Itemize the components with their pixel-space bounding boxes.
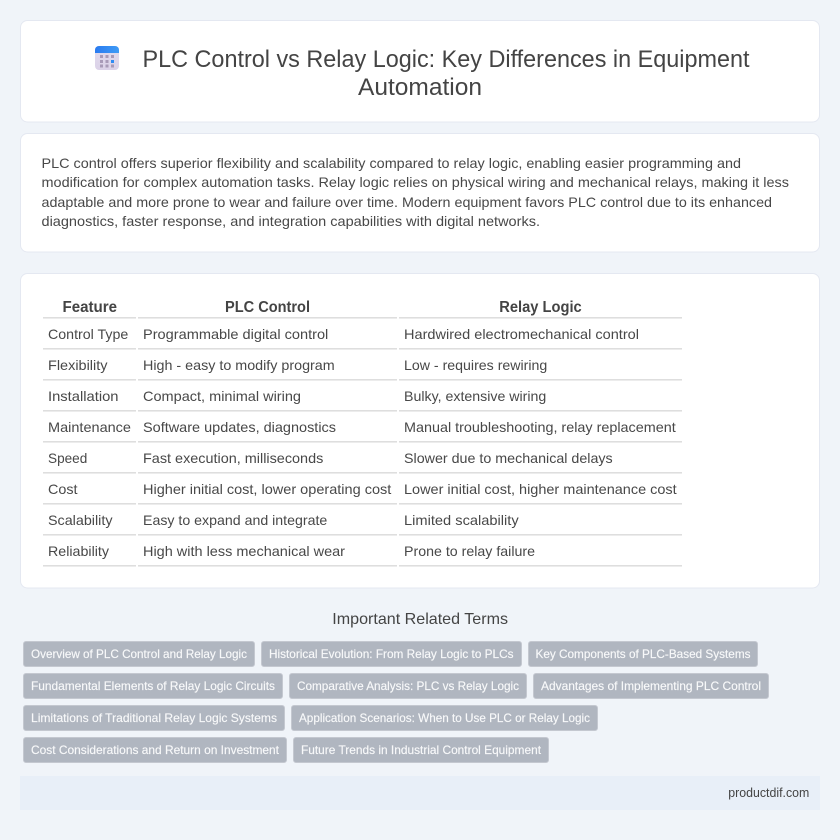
row: installation: Bulky, extensive wiring (404, 388, 546, 404)
tag row 3: Application Scenarios: When to Use PLC or Relay Logic (299, 711, 590, 725)
tag row 4: Future Trends in Industrial Control Equipment (301, 743, 542, 757)
row: installation: Compact, minimal wiring (143, 388, 301, 404)
tag row 1 (24, 642, 758, 666)
row: flexibility (43, 357, 682, 381)
tag row 1: Historical Evolution: From Relay Logic to PLCs (269, 647, 514, 661)
icon: calendar (95, 46, 119, 70)
table header row (43, 299, 682, 319)
related terms heading: Important Related Terms (332, 611, 508, 628)
row: speed (43, 450, 682, 474)
tag row 2 (24, 674, 768, 698)
panel: title header (20, 20, 820, 122)
row: speed: Speed (48, 450, 87, 466)
footer: productdif.com (728, 786, 809, 800)
summary text (42, 155, 789, 229)
tag row 2: Fundamental Elements of Relay Logic Circuits (31, 679, 275, 693)
panel: important related terms (24, 611, 768, 762)
row: maintenance (43, 419, 682, 443)
row: installation (43, 388, 682, 412)
summary text: adaptable and more prone to wear and failure over time. Modern equipment favors PLC control due to its enhanced (42, 194, 772, 210)
title: PLC Control vs Relay Logic: Key Differences in Equipment (142, 46, 750, 73)
footer (20, 776, 820, 810)
title (142, 46, 750, 101)
row: control type: Control Type (48, 326, 129, 342)
row: control type: Hardwired electromechanical control (404, 326, 639, 342)
tag row 4 (24, 738, 548, 762)
row: scalability: Scalability (48, 512, 112, 528)
summary text: modification for complex automation tasks. Relay logic relies on physical wiring and mechanical relays, making it less (42, 174, 789, 190)
panel: summary paragraph (20, 134, 820, 252)
table header row: Feature (62, 299, 117, 316)
row: scalability: Limited scalability (404, 512, 519, 528)
row: control type: Programmable digital control (143, 326, 328, 342)
row: flexibility: High - easy to modify program (143, 357, 335, 373)
tag row 2: Comparative Analysis: PLC vs Relay Logic (297, 679, 519, 693)
row: maintenance: Maintenance (48, 419, 131, 435)
row: installation: Installation (48, 388, 118, 404)
summary text: PLC control offers superior flexibility and scalability compared to relay logic, enabling easier programming and (42, 155, 741, 171)
row: cost: Higher initial cost, lower operating cost (143, 481, 391, 497)
row: reliability: Prone to relay failure (404, 543, 535, 559)
row: flexibility: Flexibility (48, 357, 108, 373)
row: control type (43, 326, 682, 350)
row: cost (43, 481, 682, 505)
row: flexibility: Low - requires rewiring (404, 357, 547, 373)
summary text: diagnostics, faster response, and integration capabilities with digital networks. (42, 213, 540, 229)
row: maintenance: Software updates, diagnostics (143, 419, 336, 435)
row: scalability (43, 512, 682, 536)
tag row 3: Limitations of Traditional Relay Logic Systems (31, 711, 277, 725)
row: speed: Slower due to mechanical delays (404, 450, 613, 466)
panel: comparison table (20, 274, 820, 588)
row: maintenance: Manual troubleshooting, relay replacement (404, 419, 676, 435)
row: speed: Fast execution, milliseconds (143, 450, 323, 466)
tag row 1: Key Components of PLC-Based Systems (536, 647, 750, 661)
row: cost: Cost (48, 481, 78, 497)
row: reliability (43, 543, 682, 567)
tag row 3 (24, 706, 598, 730)
tag row 1: Overview of PLC Control and Relay Logic (31, 647, 247, 661)
title: Automation (358, 74, 482, 101)
table header row: PLC Control (225, 299, 310, 316)
tag row 2: Advantages of Implementing PLC Control (541, 679, 761, 693)
row: cost: Lower initial cost, higher maintenance cost (404, 481, 677, 497)
table header row: Relay Logic (499, 299, 582, 316)
row: reliability: High with less mechanical wear (143, 543, 345, 559)
row: reliability: Reliability (48, 543, 109, 559)
tag row 4: Cost Considerations and Return on Investment (31, 743, 280, 757)
row: scalability: Easy to expand and integrate (143, 512, 328, 528)
